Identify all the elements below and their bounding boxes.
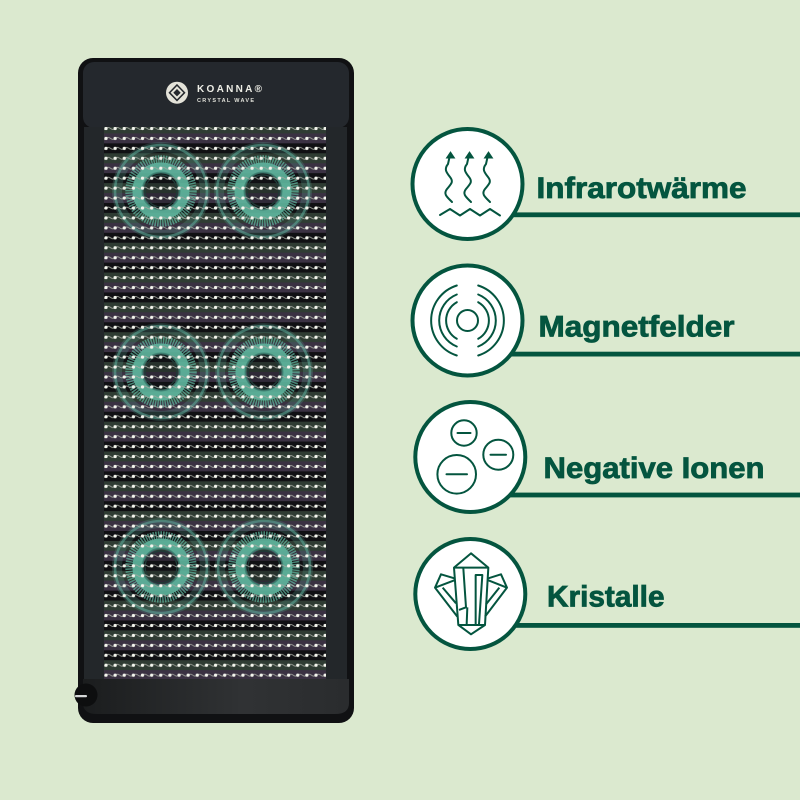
icon: heat waves (412, 129, 522, 239)
label: Negative Ionen (544, 452, 764, 485)
left side strip (84, 127, 104, 679)
icon: crystals (415, 539, 525, 649)
crystal beads (104, 127, 326, 679)
label: Infrarotwärme (536, 172, 746, 205)
crystal grid (104, 127, 326, 679)
control knob (74, 684, 98, 706)
mat outer body (78, 58, 354, 723)
label: Kristalle (547, 580, 664, 614)
energy ring top left (115, 145, 207, 237)
product name: CRYSTAL WAVE (197, 98, 254, 104)
rule (510, 623, 800, 628)
icon: negative ions (415, 402, 525, 512)
energy ring middle right (218, 326, 310, 418)
feature: Infrarotwärme (412, 129, 800, 239)
icon: magnetic field (412, 266, 522, 376)
rule (510, 493, 800, 497)
right side strip (326, 127, 347, 679)
feature: Negative Ionen (415, 402, 800, 512)
energy ring bottom right (218, 521, 310, 613)
rule (510, 352, 800, 356)
top panel (83, 62, 349, 128)
product: crystal wave mat (74, 58, 354, 723)
logo emblem (166, 82, 188, 104)
feature: Magnetfelder (412, 266, 800, 376)
feature: Kristalle (415, 539, 800, 649)
energy ring top right (217, 145, 309, 237)
energy ring middle left (115, 326, 207, 418)
energy ring bottom left (115, 521, 207, 613)
rule (510, 212, 800, 217)
label: Magnetfelder (538, 310, 735, 344)
brand logo (166, 82, 263, 104)
bottom panel (83, 679, 349, 714)
brand name: KOANNA® (197, 84, 263, 95)
